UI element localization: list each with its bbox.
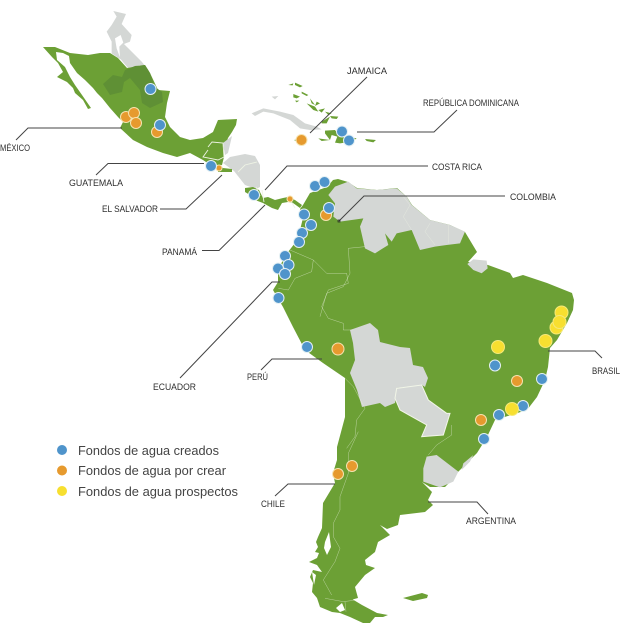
country labels xyxy=(0,66,620,527)
leader lines xyxy=(16,77,602,514)
country labels: EL SALVADOR xyxy=(102,204,158,215)
northern Mexico darker states xyxy=(103,65,163,108)
Amazon delta island in grey xyxy=(467,259,488,273)
Mexico xyxy=(43,47,237,166)
country labels: PERÚ xyxy=(247,372,268,383)
country labels: PANAMÁ xyxy=(162,247,198,258)
country borders xyxy=(203,142,452,612)
legend item: created: Fondos de agua creados xyxy=(78,444,219,458)
country labels: REPÚBLICA DOMINICANA xyxy=(423,98,520,109)
legend item: prospective: Fondos de agua prospectos xyxy=(78,485,238,499)
Bolivia in grey xyxy=(350,323,428,407)
legend xyxy=(57,444,238,499)
country labels: ARGENTINA xyxy=(466,516,517,527)
country labels: COSTA RICA xyxy=(432,162,483,173)
Bahamas, Hispaniola and small Caribbean islands xyxy=(288,83,376,143)
water fund markers on the map xyxy=(120,84,568,480)
markers: funds created xyxy=(145,84,548,444)
country labels: COLOMBIA xyxy=(510,192,557,203)
Costa Rica and Panama xyxy=(245,187,302,210)
country labels: GUATEMALA xyxy=(69,178,124,189)
Uruguay in grey xyxy=(423,455,458,487)
Paraguay in grey xyxy=(395,385,450,437)
Falkland Islands xyxy=(403,593,428,601)
legend item: to be created: Fondos de agua por crear xyxy=(78,464,226,478)
country labels: MÉXICO xyxy=(0,143,30,154)
Venezuela and the Guianas in grey xyxy=(328,182,465,253)
country labels: JAMAICA xyxy=(347,66,388,77)
markers: funds to be created xyxy=(120,108,522,480)
South America xyxy=(273,179,574,623)
Belize, Honduras and Nicaragua in grey xyxy=(223,136,260,189)
Patagonian fjords and Tierra del Fuego inlet xyxy=(312,532,345,612)
Cuba in grey xyxy=(252,96,322,130)
United States fragment in grey xyxy=(107,11,149,71)
country labels: ECUADOR xyxy=(153,382,196,393)
El Salvador xyxy=(218,165,232,172)
markers: prospective funds xyxy=(492,306,568,416)
country labels: BRASIL xyxy=(592,366,620,377)
Brazilian lagoon in grey xyxy=(462,455,473,470)
country labels: CHILE xyxy=(261,499,285,510)
